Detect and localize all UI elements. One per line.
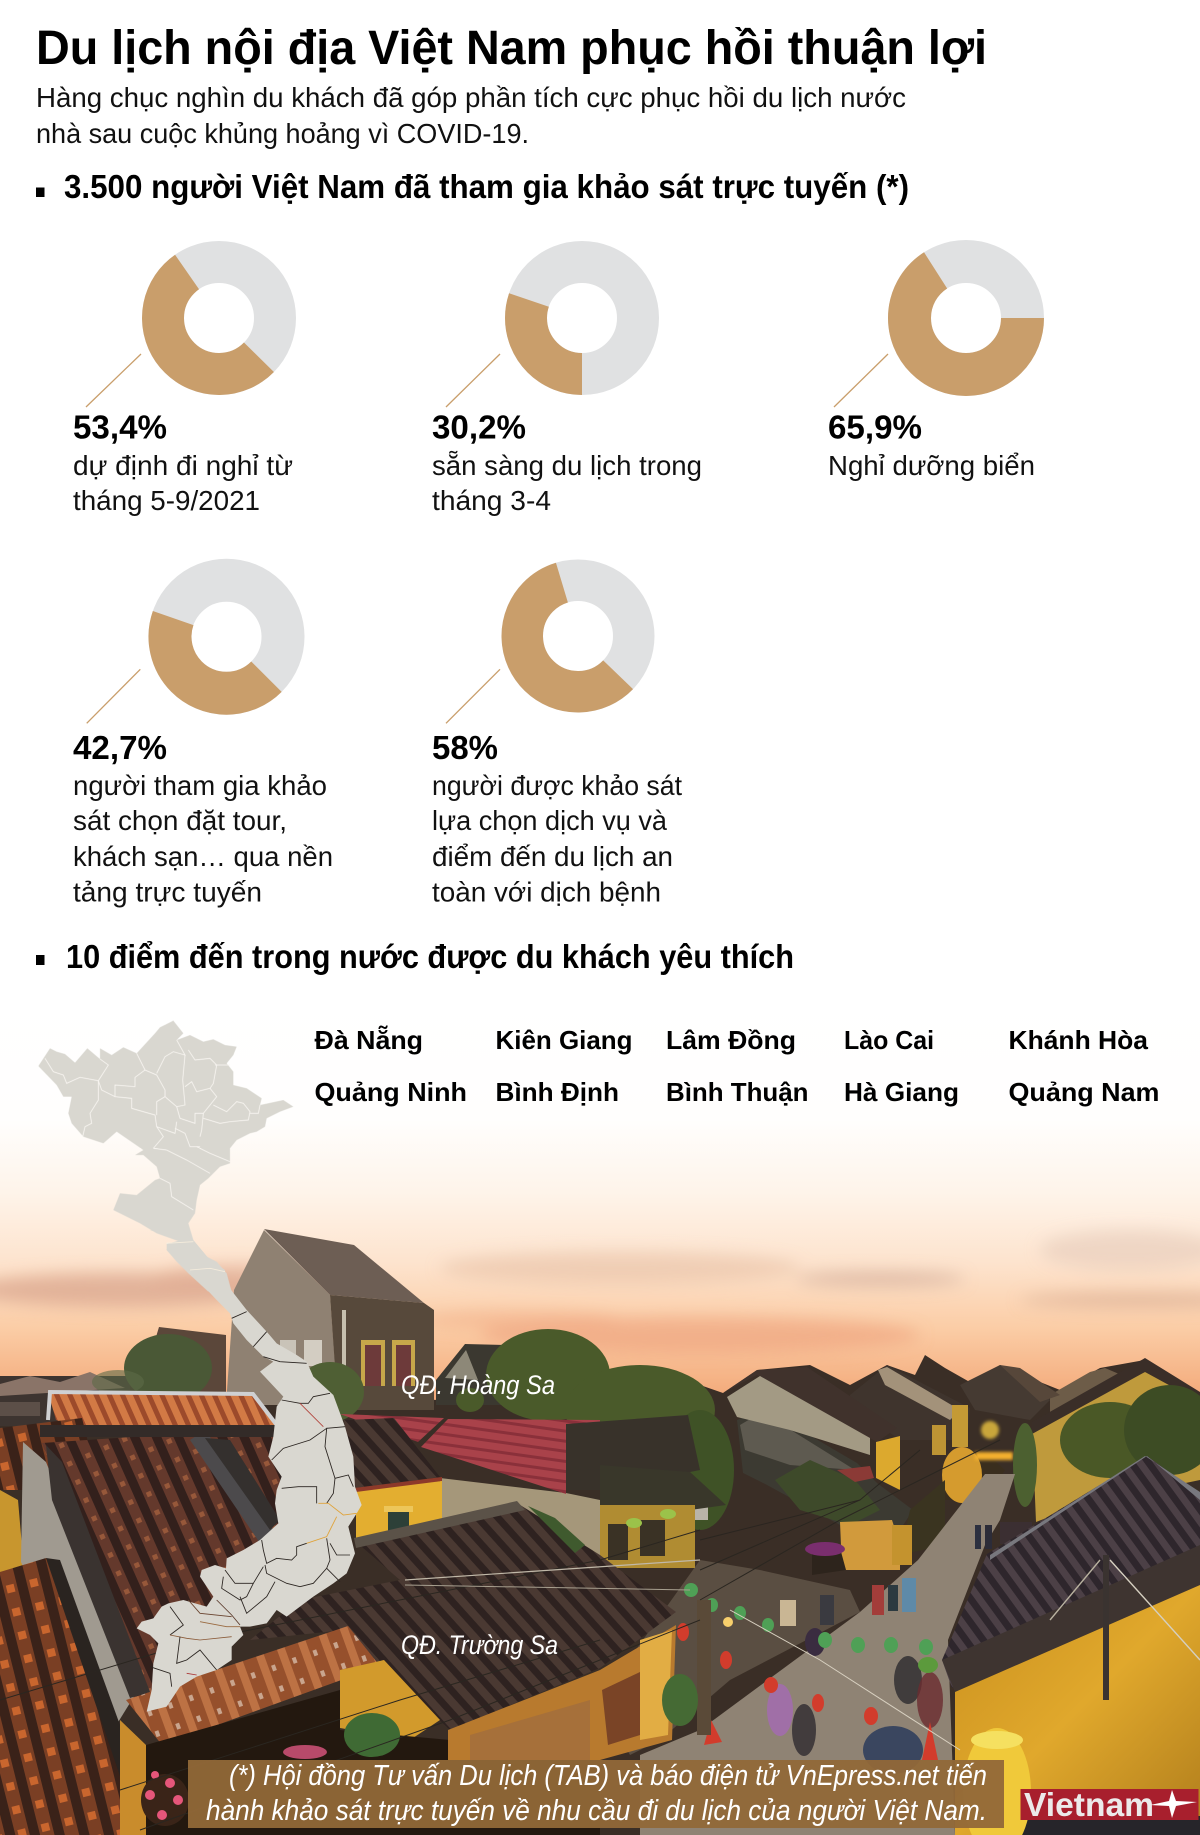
donut: 30,2%	[446, 262, 638, 407]
donut: 42,7%	[87, 557, 306, 723]
city list: Bình Thuận	[666, 1077, 808, 1107]
stat: 58%	[432, 729, 682, 908]
grey side wall	[21, 1442, 138, 1745]
building B2 dark	[737, 1408, 913, 1530]
plants	[141, 1674, 698, 1826]
building row 3	[850, 1365, 970, 1440]
distant rooftops left	[0, 1376, 130, 1426]
stat: 58%: lựa chọn dịch vụ và	[432, 805, 667, 836]
building right of red roof	[566, 1415, 700, 1490]
sky	[0, 1000, 1200, 1400]
city list: Lào Cai	[844, 1025, 934, 1055]
map: northern region	[38, 1021, 293, 1292]
photo: Hoi An old town at sunset	[0, 1000, 1200, 1835]
yellow wall under rust roof	[340, 1660, 440, 1740]
donut: 53,4%	[86, 239, 298, 407]
stat: 42,7%: 42,7%	[73, 729, 167, 766]
rust roof	[126, 1626, 380, 1745]
logo: Vietnam+: Vietnam	[1024, 1786, 1154, 1823]
city list: Khánh Hòa	[1008, 1025, 1149, 1055]
small dark roof left	[140, 1327, 226, 1395]
subtitle: nhà sau cuộc khủng hoảng vì COVID-19.	[36, 118, 529, 149]
city list: Bình Định	[496, 1077, 619, 1107]
city list: Kiên Giang	[496, 1025, 632, 1055]
stat: 42,7%: người tham gia khảo	[73, 770, 327, 801]
label: Hoang Sa: QĐ. Hoàng Sa	[401, 1370, 555, 1400]
stat: 58%: 58%	[432, 729, 498, 766]
city list: Đà Nẵng	[314, 1025, 423, 1055]
stat: 53,4%: dự định đi nghỉ từ	[73, 450, 293, 481]
stat: 58%: người được khảo sát	[432, 770, 682, 801]
subtitle: Hàng chục nghìn du khách đã góp phần tích cực phục hồi du lịch nước	[36, 82, 906, 113]
subtitle	[36, 82, 906, 149]
orange tile roof	[48, 1392, 276, 1436]
building B1	[723, 1367, 897, 1442]
lit shop B	[840, 1520, 900, 1570]
footnote	[188, 1760, 1004, 1828]
city list: Hà Giang	[844, 1077, 959, 1107]
stat: 58%: toàn với dịch bệnh	[432, 876, 661, 908]
heading: destinations: 10 điểm đến trong nước được du khách yêu thích	[66, 938, 794, 975]
city list	[314, 1025, 1160, 1107]
big centre-right dark roof	[250, 1503, 676, 1730]
roof far left	[0, 1418, 90, 1490]
tree centre	[296, 1329, 734, 1530]
stat: 42,7%: khách sạn… qua nền	[73, 841, 333, 872]
stat: 65,9%	[828, 409, 1035, 481]
backdrop: dark town mass	[0, 1355, 1200, 1835]
stat: 58%: điểm đến du lịch an	[432, 841, 673, 872]
main dark roof	[42, 1428, 300, 1700]
yellow wall far left	[0, 1490, 24, 1572]
tree left	[92, 1334, 212, 1402]
map of Vietnam	[38, 1021, 362, 1712]
stat: 30,2%: 30,2%	[432, 409, 526, 446]
label: Truong Sa: QĐ. Trường Sa	[401, 1630, 558, 1660]
lantern	[963, 1728, 1031, 1835]
wires	[0, 1440, 1000, 1830]
street	[640, 1474, 1015, 1835]
yellow house	[356, 1481, 442, 1540]
dark underside	[146, 1690, 600, 1835]
stat: 53,4%: tháng 5-9/2021	[73, 485, 260, 516]
city list: Lâm Đồng	[666, 1025, 796, 1055]
donut: 65,9%	[834, 262, 1022, 407]
lit shops along street	[945, 1452, 1005, 1500]
old stone house	[226, 1230, 338, 1405]
stat: 42,7%	[73, 729, 333, 908]
stat: 53,4%: 53,4%	[73, 409, 167, 446]
map: southern region	[137, 1230, 362, 1712]
stat: 42,7%: tảng trực tuyến	[73, 876, 262, 908]
stat: 30,2%: tháng 3-4	[432, 485, 551, 516]
stat: 42,7%: sát chọn đặt tour,	[73, 805, 287, 836]
donut: 58%	[446, 557, 657, 723]
wall under red roof	[440, 1478, 600, 1560]
title: Du lịch nội địa Việt Nam phục hồi thuận lợi	[36, 22, 987, 75]
stat: 30,2%: sẵn sàng du lịch trong	[432, 450, 702, 481]
city list: Quảng Ninh	[314, 1077, 467, 1107]
footnote: (*) Hội đồng Tư vấn Du lịch (TAB) và báo điện tử VnEpress.net tiến	[229, 1760, 987, 1792]
far right building yellow	[1032, 1361, 1200, 1522]
stat: 65,9%: Nghỉ dưỡng biển	[828, 450, 1035, 481]
red roof	[340, 1414, 444, 1442]
lit shop	[448, 1625, 676, 1760]
footnote: hành khảo sát trực tuyến về nhu cầu đi du lịch của người Việt Nam.	[206, 1795, 987, 1827]
yellow wall right	[955, 1585, 1200, 1835]
lower-left tile roof	[0, 1558, 145, 1835]
big roof at right	[942, 1456, 1200, 1688]
city list: Quảng Nam	[1008, 1077, 1160, 1107]
people and lanterns on the street	[677, 1490, 1032, 1774]
back buildings right	[1050, 1368, 1200, 1440]
dark roof mid	[344, 1418, 440, 1488]
clouds	[0, 1230, 1200, 1353]
heading: survey: 3.500 người Việt Nam đã tham gia khảo sát trực tuyến (*)	[64, 168, 909, 205]
stat: 65,9%: 65,9%	[828, 409, 922, 446]
stat: 53,4%	[73, 409, 293, 516]
trees on yellow building	[1013, 1385, 1200, 1507]
small gable house	[436, 1344, 510, 1405]
stat: 30,2%	[432, 409, 702, 516]
